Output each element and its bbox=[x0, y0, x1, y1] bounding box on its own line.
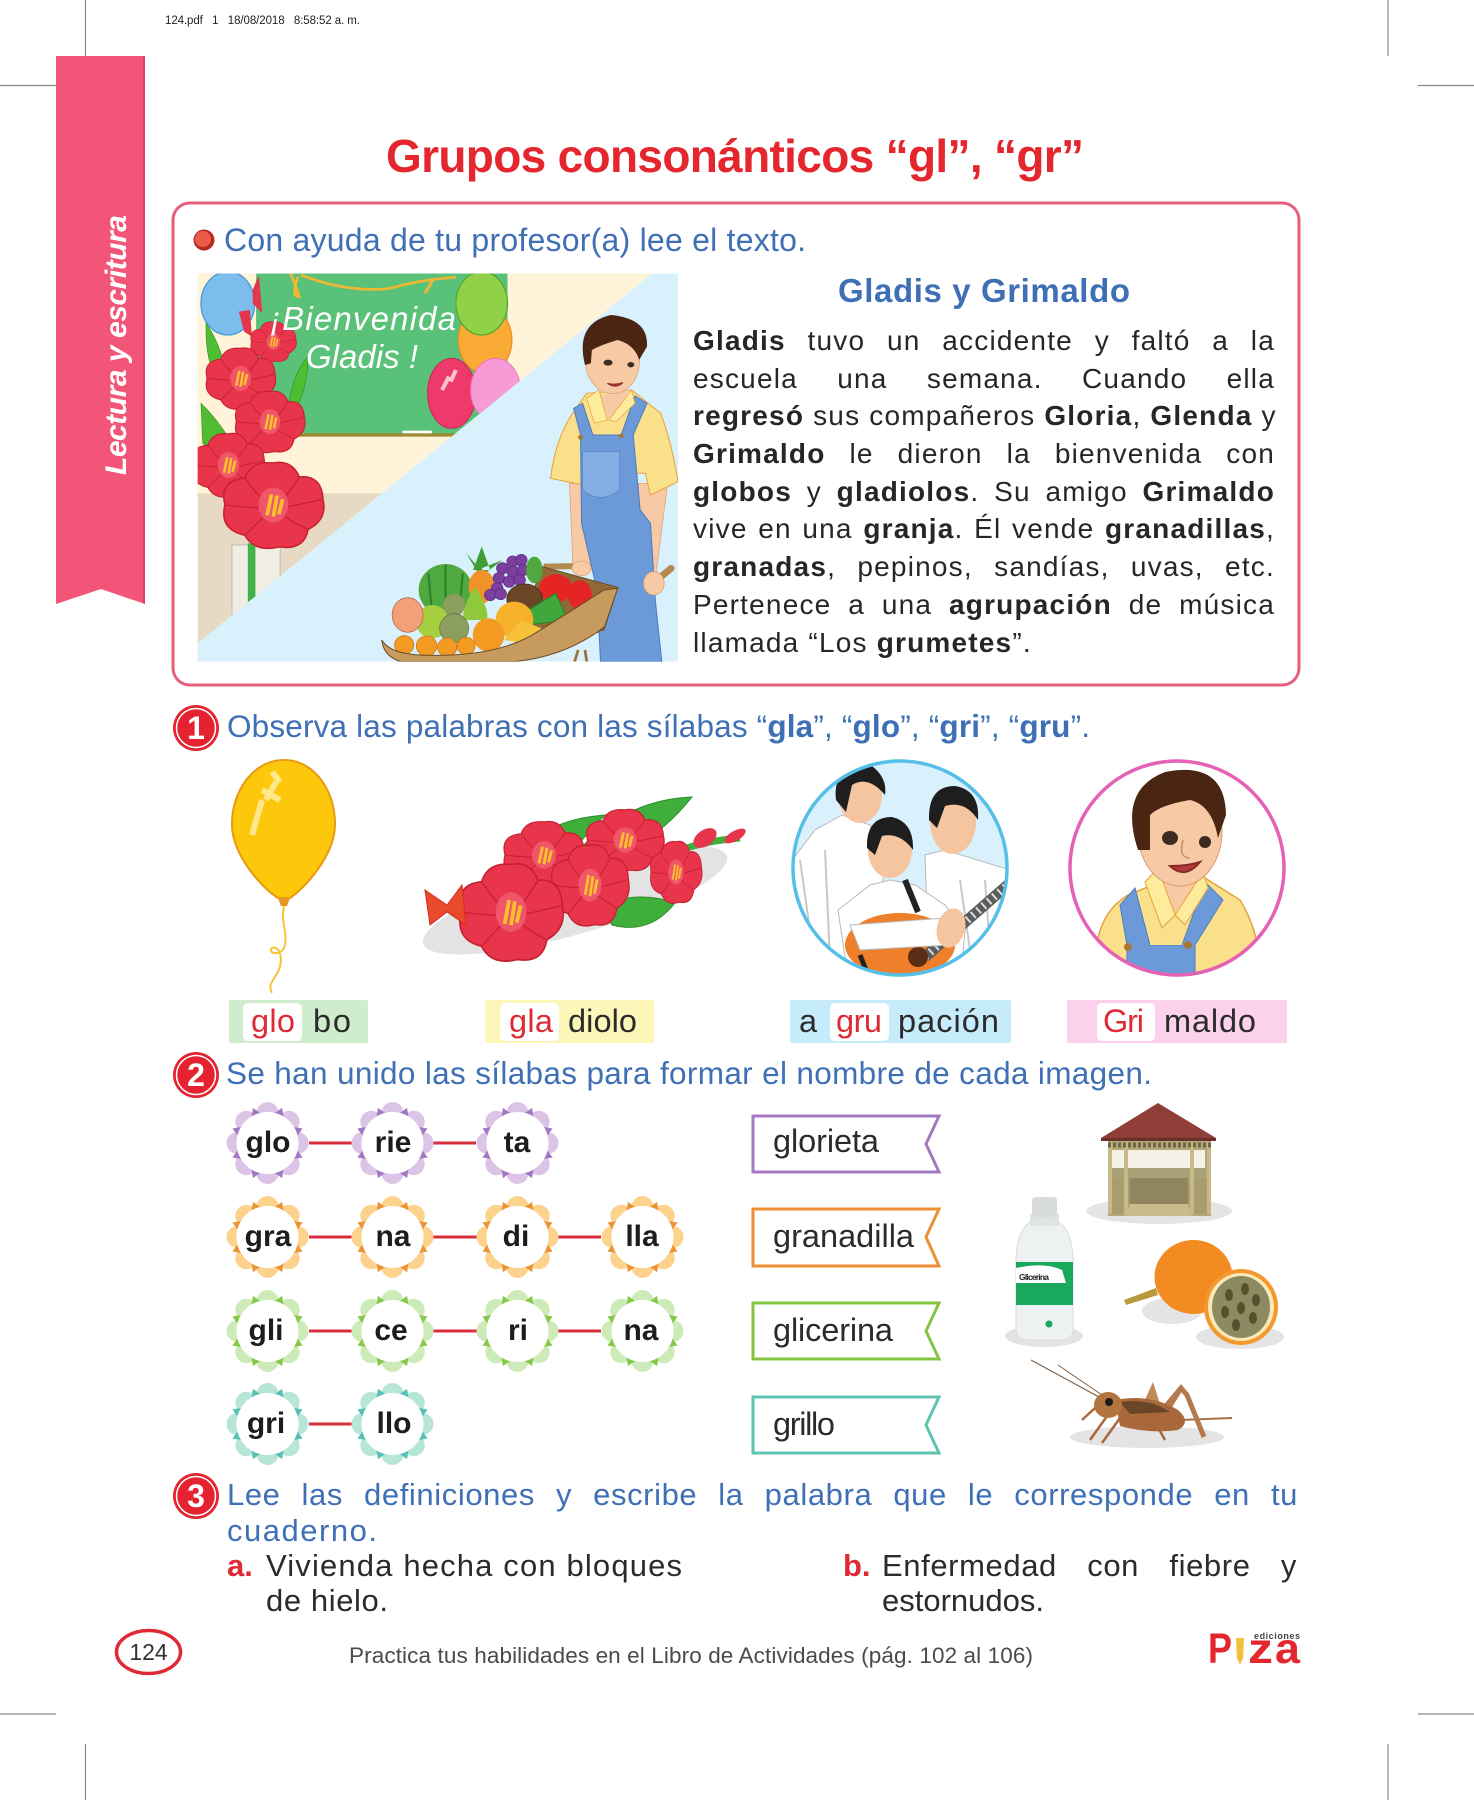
word label: agrupación: gru bbox=[836, 1003, 882, 1039]
shirt bbox=[551, 390, 678, 495]
picture: music group in circle bbox=[786, 761, 1010, 990]
syllable chain: gli-ce-ri-na: ce bbox=[374, 1314, 408, 1347]
syllable chain: gli-ce-ri-na: gli bbox=[248, 1314, 284, 1347]
word tag: granadilla bbox=[753, 1209, 939, 1266]
side tab: Lectura y escritura bbox=[56, 56, 145, 604]
section 2 heading: 2 bbox=[187, 1057, 205, 1093]
word tag: glorieta bbox=[753, 1116, 939, 1172]
story paragraph: Gladis tuvo un accidente y faltó a la bbox=[693, 325, 1275, 356]
story paragraph: Grimaldo le dieron la bienvenida con bbox=[693, 438, 1275, 469]
word tag: glorieta: glorieta bbox=[773, 1123, 880, 1159]
story paragraph bbox=[693, 322, 1277, 672]
syllable chain: glo-rie-ta bbox=[226, 1102, 558, 1184]
syllable chain: gra-na-di-lla bbox=[226, 1196, 684, 1278]
logo: ediciones Piza: P bbox=[1208, 1625, 1232, 1673]
word tag: glicerina bbox=[753, 1303, 939, 1359]
section 1 heading: Observa las palabras con las sílabas “gla”, “glo”, “gri”, “gru”. bbox=[227, 708, 1090, 744]
picture: yellow balloon bbox=[232, 760, 335, 993]
word tag: grillo: grillo bbox=[773, 1406, 835, 1442]
picture: glycerin bottle bbox=[1005, 1197, 1083, 1347]
overalls bbox=[574, 396, 662, 662]
instruction text: Con ayuda de tu profesor(a) lee el texto. bbox=[224, 222, 806, 258]
tray front bbox=[382, 588, 618, 662]
story paragraph: Pertenece a una agrupación de música bbox=[693, 589, 1275, 620]
word label: agrupación: a bbox=[799, 1003, 818, 1039]
logo: ediciones Piza bbox=[1208, 1625, 1301, 1673]
head bbox=[601, 390, 628, 420]
wheelbarrow handles bbox=[597, 568, 671, 630]
section 3 heading bbox=[173, 1473, 1299, 1548]
syllable chain: gli-ce-ri-na bbox=[226, 1290, 684, 1372]
word label: Grimaldo: maldo bbox=[1164, 1003, 1256, 1039]
word label: gladiolo bbox=[485, 1000, 654, 1043]
word tag: granadilla: granadilla bbox=[773, 1218, 915, 1254]
word label: globo bbox=[229, 1000, 368, 1043]
story paragraph: vive en una granja. Él vende granadillas, bbox=[693, 513, 1275, 544]
picture: gazebo bbox=[1086, 1103, 1232, 1224]
story heading: Gladis y Grimaldo bbox=[838, 272, 1130, 309]
story paragraph: globos y gladiolos. Su amigo Grimaldo bbox=[693, 476, 1275, 507]
bullet icon bbox=[194, 230, 214, 250]
logo: ediciones Piza: a bbox=[1275, 1625, 1301, 1673]
picture: gladiolus flowers bbox=[414, 797, 748, 976]
print header text: 124.pdf 1 18/08/2018 8:58:52 a. m. bbox=[165, 15, 360, 27]
word label: gladiolo: diolo bbox=[568, 1003, 637, 1039]
panel: reading bbox=[173, 203, 1299, 685]
definition b: b. bbox=[843, 1548, 871, 1583]
word label: Grimaldo: Gri bbox=[1103, 1003, 1144, 1039]
logo: ediciones Piza: ediciones bbox=[1254, 1631, 1300, 1641]
syllable chain: gri-llo: gri bbox=[247, 1407, 285, 1440]
word label: agrupación bbox=[790, 1000, 1011, 1043]
definition b: estornudos. bbox=[882, 1583, 1044, 1618]
word label: globo: bo bbox=[313, 1003, 351, 1039]
syllable chain: gra-na-di-lla: lla bbox=[625, 1220, 659, 1253]
side tab: Lectura y escritura: Lectura y escritura bbox=[100, 215, 133, 475]
story paragraph: llamada “Los grumetes”. bbox=[693, 626, 1032, 658]
illustration: welcome scene with boy and wheelbarrow bbox=[193, 272, 678, 662]
picture: cricket bbox=[1031, 1360, 1232, 1448]
syllable chain: gli-ce-ri-na: na bbox=[623, 1314, 659, 1347]
section 3 heading: cuaderno. bbox=[227, 1513, 377, 1548]
section 3 heading: 3 bbox=[187, 1478, 205, 1514]
illustration: welcome scene with boy and wheelbarrow: Gladis ! bbox=[306, 338, 418, 375]
story paragraph: regresó sus compañeros Gloria, Glenda y bbox=[693, 400, 1277, 431]
word label: globo: glo bbox=[251, 1003, 295, 1039]
word tag: grillo bbox=[753, 1397, 939, 1453]
section 3 heading: Lee las definiciones y escribe la palabra que le corresponde en tu bbox=[227, 1477, 1298, 1512]
footer note: Practica tus habilidades en el Libro de Actividades (pág. 102 al 106) bbox=[349, 1643, 1033, 1668]
section 1 heading: 1 bbox=[187, 710, 205, 746]
syllable chain: glo-rie-ta: glo bbox=[246, 1126, 290, 1159]
tray back bbox=[514, 567, 618, 647]
syllable chain: gli-ce-ri-na: ri bbox=[508, 1314, 528, 1347]
word label: agrupación: pación bbox=[898, 1003, 999, 1039]
blackboard message: ¡Bienvenida bbox=[270, 300, 456, 337]
syllable chain: glo-rie-ta: rie bbox=[375, 1126, 411, 1159]
boy arms bbox=[570, 483, 590, 570]
logo: ediciones Piza: z bbox=[1248, 1625, 1273, 1673]
word tag: glicerina: glicerina bbox=[773, 1312, 894, 1348]
syllable chain: gri-llo: llo bbox=[376, 1407, 412, 1440]
syllable chain: gri-llo bbox=[226, 1383, 434, 1465]
syllable chain: gra-na-di-lla: gra bbox=[245, 1220, 292, 1253]
definition b: Enfermedad con fiebre y bbox=[882, 1548, 1297, 1583]
story paragraph: escuela una semana. Cuando ella bbox=[693, 363, 1275, 394]
definition a: de hielo. bbox=[266, 1583, 388, 1618]
page number: 124 bbox=[129, 1639, 168, 1665]
hands bbox=[572, 561, 591, 576]
syllable chain: glo-rie-ta: ta bbox=[504, 1126, 531, 1159]
word label: Grimaldo bbox=[1067, 1000, 1287, 1043]
section 2 heading: Se han unido las sílabas para formar el nombre de cada imagen. bbox=[226, 1055, 1152, 1091]
page number bbox=[116, 1630, 180, 1674]
syllable chain: gra-na-di-lla: na bbox=[375, 1220, 411, 1253]
story paragraph: granadas, pepinos, sandías, uvas, etc. bbox=[693, 551, 1275, 582]
definition a: Vivienda hecha con bloques bbox=[266, 1548, 682, 1583]
word label: gladiolo: gla bbox=[509, 1003, 554, 1039]
title: Grupos consonánticos “gl”, “gr” bbox=[386, 130, 1084, 182]
definition a bbox=[227, 1548, 682, 1618]
definition b bbox=[843, 1548, 1298, 1618]
picture: Grimaldo portrait in circle bbox=[1070, 761, 1284, 985]
definition a: a. bbox=[227, 1548, 253, 1583]
picture: glycerin bottle: Glicerina bbox=[1019, 1272, 1049, 1282]
fruit bbox=[419, 564, 472, 616]
picture: granadilla fruit bbox=[1124, 1240, 1284, 1349]
syllable chain: gra-na-di-lla: di bbox=[503, 1220, 529, 1253]
